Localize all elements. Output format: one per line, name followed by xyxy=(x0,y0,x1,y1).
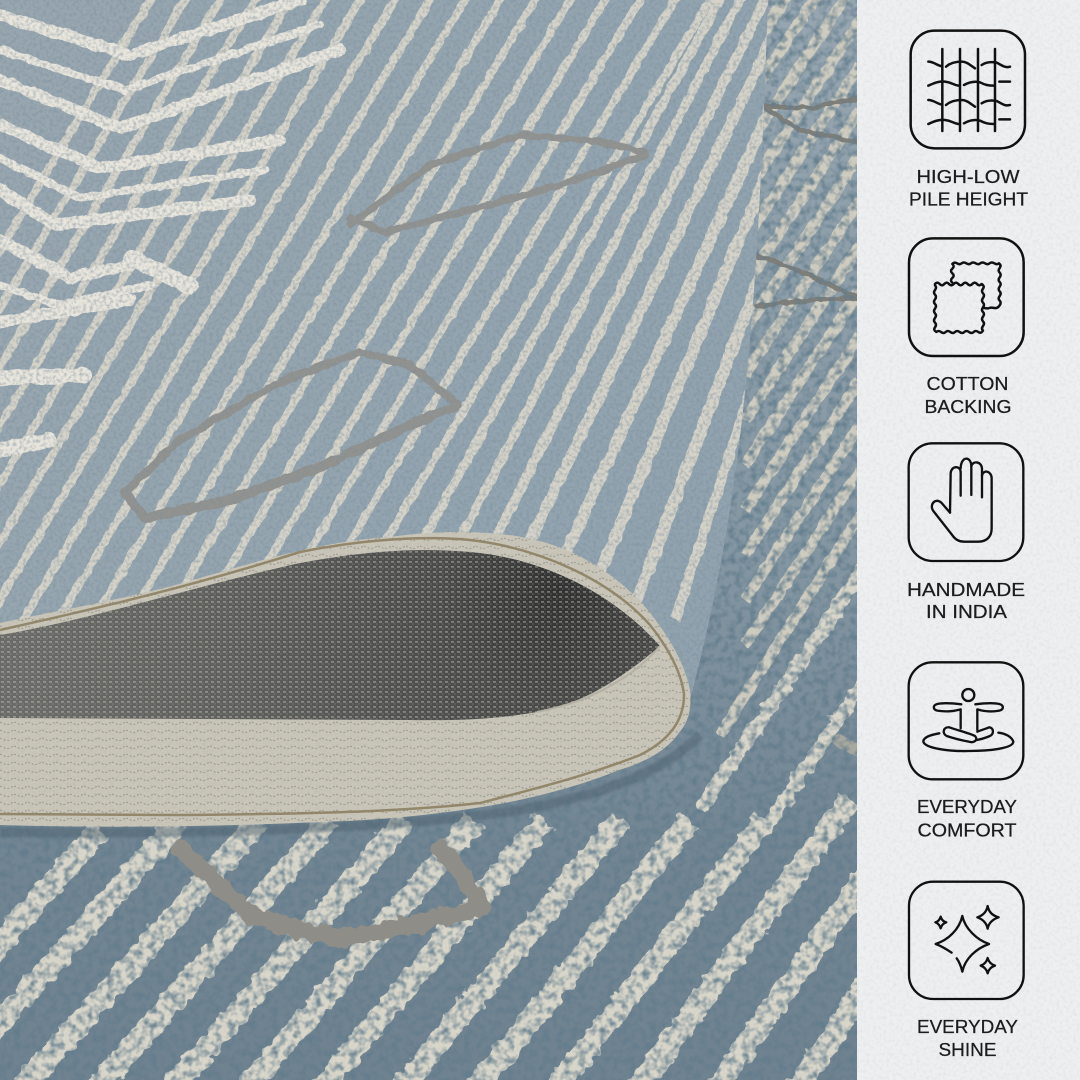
coarse pile texture on lower rug xyxy=(0,0,860,1080)
stitched edge lines xyxy=(0,538,684,815)
icon: open hand xyxy=(909,443,1023,561)
label: high-low pile height: HIGH-LOW xyxy=(916,166,1020,187)
label: cotton backing xyxy=(924,373,1012,417)
panel background xyxy=(857,0,1080,1080)
icon: sparkles xyxy=(909,882,1024,999)
label: cotton backing: BACKING xyxy=(924,396,1012,417)
grey motif on right rug strip xyxy=(755,98,857,750)
icon: fabric swatches xyxy=(909,238,1024,356)
label: high-low pile height xyxy=(909,166,1028,210)
icon: pile height weave xyxy=(911,31,1025,148)
label: handmade in india: IN INDIA xyxy=(926,601,1008,622)
right rug strip stripes xyxy=(720,0,860,735)
label: everyday shine xyxy=(917,1016,1018,1060)
icon: seated meditation figure xyxy=(909,662,1023,779)
lower rug stripes xyxy=(0,560,980,1080)
fold backing band xyxy=(0,530,691,827)
feature: handmade in india xyxy=(907,443,1025,622)
label: handmade in india: HANDMADE xyxy=(907,579,1025,600)
upper rug stripes xyxy=(0,0,768,622)
label: everyday shine: SHINE xyxy=(938,1039,996,1060)
label: handmade in india xyxy=(907,579,1025,622)
rug surface behind the fold xyxy=(0,0,860,1080)
cream herringbone motif xyxy=(0,0,340,450)
grey diamond motifs xyxy=(125,135,645,518)
grey motif on lower rug xyxy=(180,848,482,938)
feature: cotton backing xyxy=(909,238,1024,417)
label: cotton backing: COTTON xyxy=(926,373,1008,394)
shadow under fold xyxy=(0,735,700,833)
label: everyday comfort: EVERYDAY xyxy=(917,796,1017,817)
feature: everyday shine xyxy=(909,882,1024,1060)
feature: everyday comfort xyxy=(909,662,1023,840)
folded rug top surface xyxy=(0,0,768,698)
fine pile texture xyxy=(0,0,790,700)
label: everyday comfort xyxy=(917,796,1017,840)
label: everyday comfort: COMFORT xyxy=(918,820,1016,840)
label: everyday shine: EVERYDAY xyxy=(917,1016,1018,1037)
label: high-low pile height: PILE HEIGHT xyxy=(909,188,1028,210)
feature: high-low pile height xyxy=(909,31,1028,209)
rug photograph xyxy=(0,0,857,1080)
rug underside hollow xyxy=(0,550,660,720)
